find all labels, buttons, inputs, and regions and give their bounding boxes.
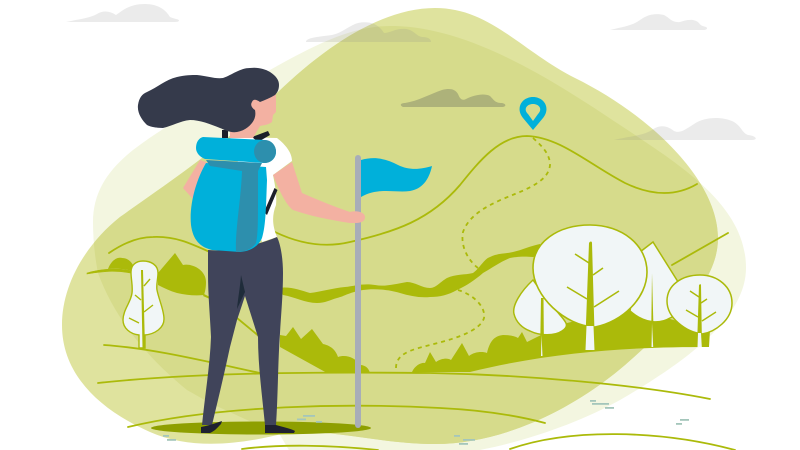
trousers xyxy=(202,237,283,425)
lower left bushes xyxy=(280,327,370,373)
bedroll end xyxy=(254,140,276,163)
hill line: far left xyxy=(109,237,212,253)
trouser shadow xyxy=(237,275,245,309)
bedroll xyxy=(196,137,276,163)
background blob: overlap xyxy=(93,26,746,450)
river band xyxy=(278,244,545,303)
cloud: dark middle xyxy=(401,89,505,107)
backpack body xyxy=(191,163,267,252)
left bushes and hill xyxy=(87,253,212,300)
shoes xyxy=(201,421,222,433)
flag pole xyxy=(355,155,361,428)
hiker xyxy=(138,68,365,433)
cloud: top left xyxy=(66,4,179,22)
background blob: pale xyxy=(93,26,746,450)
cloud: top centre xyxy=(306,22,431,42)
lower hill line behind the hiker xyxy=(237,318,260,337)
t-shirt xyxy=(230,137,292,242)
backpack flap shade xyxy=(206,160,262,252)
hill lines: left foreground xyxy=(98,345,735,450)
tree: right back triangle xyxy=(630,242,692,347)
dashed trail: lower xyxy=(396,290,484,368)
cloud: top right xyxy=(610,14,707,30)
water dashes xyxy=(163,400,689,445)
hill line: right ridge xyxy=(672,233,728,265)
dashed trail: upper xyxy=(462,138,550,268)
hair xyxy=(138,68,279,132)
hill line: back ridge with peak xyxy=(275,136,697,245)
tree: small left xyxy=(123,261,164,348)
cloud: right xyxy=(614,118,756,140)
tree: left back xyxy=(514,280,566,356)
background blob: mid green xyxy=(62,8,718,444)
ground shadow xyxy=(151,422,371,434)
flag xyxy=(361,158,432,197)
left arm xyxy=(183,160,214,210)
tree: small right xyxy=(667,275,732,347)
forest silhouette on the right xyxy=(412,308,710,372)
neck and face xyxy=(230,94,276,138)
right arm xyxy=(273,162,365,223)
map pin icon xyxy=(520,97,546,130)
straps xyxy=(222,130,278,215)
tree: large centre xyxy=(533,225,647,350)
